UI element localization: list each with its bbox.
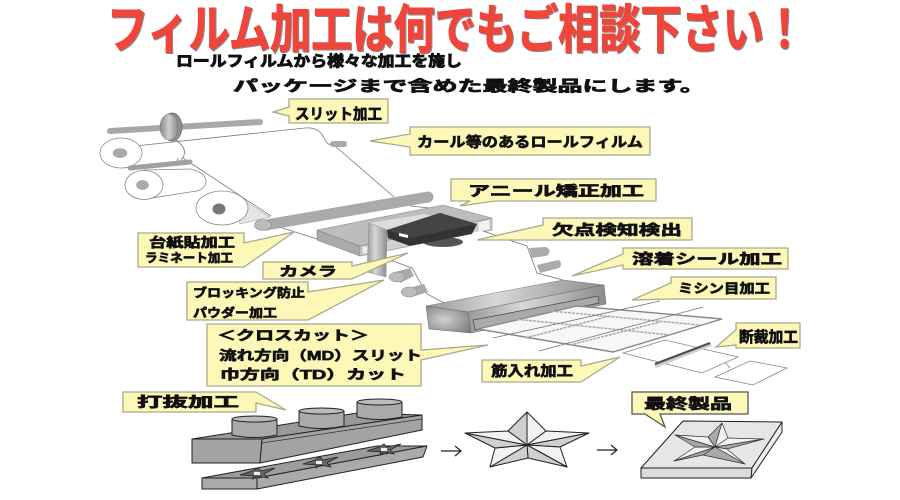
punched plate with stars [202,444,427,489]
callout: anneal: アニール矯正加工 [468,183,644,199]
perforated sheet [478,301,722,352]
callout: final product: 最終製品 [644,395,732,413]
film rollers and rolls [100,113,440,239]
cylinders [232,399,402,438]
roll 1 [100,138,185,168]
roll 3 [196,191,270,225]
callout: weld seal: 溶着シール加工 [632,251,782,267]
callout: cross cut [207,324,488,386]
callout: creasing: 筋入れ加工 [491,363,573,379]
callout: anneal [451,179,656,206]
callout: die cutting: 打抜加工 [137,394,239,410]
callout: die cutting [123,392,286,412]
callout: blocking prevention [187,280,384,320]
callout: curled roll film: カール等のあるロールフィルム [417,134,643,150]
callout: blocking prevention: ブロッキング防止 [193,285,305,300]
curved film sheet after annealing [400,231,563,306]
callout: laminate [138,232,294,267]
callout: slit [273,99,388,123]
callout: final product [632,392,748,427]
callout: perforation: ミシン目加工 [678,281,770,296]
callout: weld seal [572,248,788,276]
callout: cross cut: ＜クロスカット＞ [217,328,369,343]
callout: curled roll film [370,127,650,155]
die-cutting block [192,399,422,463]
callout: slit: スリット加工 [295,106,382,123]
arrow 1 [441,446,461,456]
small rod [130,162,190,168]
subtitle text [176,52,705,95]
callout: camera [263,253,408,279]
callout: laminate: ラミネート加工 [145,251,233,265]
callout: blocking prevention: パウダー加工 [193,305,277,320]
callout: defect detection: 欠点検知検出 [552,222,682,238]
rollers [389,247,561,297]
callout: camera: カメラ [279,264,337,279]
callout: perforation [632,277,776,300]
arrow 2 [597,445,617,455]
subtitle text: パッケージまで含めた最終製品にします。 [233,77,705,95]
callout: cross cut: 流れ方向（MD）スリット [219,348,422,363]
top slit rod [110,113,260,141]
callout: creasing [482,357,620,382]
callout: cutting [716,323,800,348]
roll 2 [125,169,206,200]
cut sheets and blade [623,340,787,385]
callout: laminate: 台紙貼加工 [149,235,235,250]
metal plate [367,223,387,277]
callout: cutting: 断裁加工 [739,329,798,346]
large roller [254,197,428,230]
callout: cross cut: 巾方向（TD）カット [220,367,406,382]
subtitle text: ロールフィルムから様々な加工を施し [176,52,462,70]
star [465,412,589,467]
callout: defect detection [477,218,692,240]
icon: camera [387,213,477,247]
final product [641,421,782,478]
sealing unit [426,280,606,333]
annealing unit [317,205,492,256]
